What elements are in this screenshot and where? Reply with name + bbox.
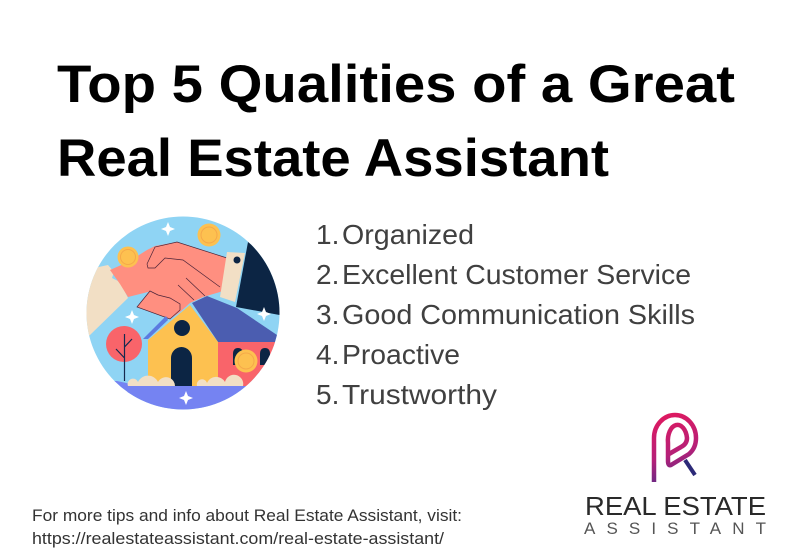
numbered list: Good Communication Skills xyxy=(342,299,695,330)
sparkles xyxy=(125,222,271,405)
illustration: handshake over house xyxy=(85,215,285,415)
footer note xyxy=(32,506,462,548)
house side red xyxy=(218,342,275,386)
house front yellow xyxy=(148,305,218,386)
house window and door xyxy=(174,320,190,336)
numbered list: 5. xyxy=(316,379,339,410)
shirt cuff xyxy=(220,252,245,302)
house roof blue xyxy=(192,296,277,342)
title: Top 5 Qualities of a Great xyxy=(57,55,735,114)
numbered list: Trustworthy xyxy=(342,379,497,410)
title: Real Estate Assistant xyxy=(57,129,609,188)
numbered list: 1. xyxy=(316,219,339,250)
logo wordmark: REAL ESTATE xyxy=(585,491,766,521)
logo subtitle: ASSISTANT xyxy=(584,519,766,538)
bushes xyxy=(128,375,243,386)
tree xyxy=(106,326,142,381)
logo mark xyxy=(654,415,696,482)
title xyxy=(57,55,735,188)
dark sleeve xyxy=(236,242,280,315)
logo xyxy=(584,415,766,538)
coins xyxy=(118,224,258,372)
ground xyxy=(114,381,246,410)
handshake xyxy=(110,242,227,319)
numbered list: 3. xyxy=(316,299,339,330)
left sleeve hand xyxy=(85,265,128,340)
numbered list: Proactive xyxy=(342,339,460,370)
numbered list: Organized xyxy=(342,219,474,250)
numbered list xyxy=(316,219,695,410)
footer note: For more tips and info about Real Estate Assistant, visit: xyxy=(32,506,462,525)
numbered list: Excellent Customer Service xyxy=(342,259,691,290)
numbered list: 4. xyxy=(316,339,339,370)
sky background xyxy=(85,215,285,415)
numbered list: 2. xyxy=(316,259,339,290)
footer note: https://realestateassistant.com/real-estate-assistant/ xyxy=(32,529,444,548)
